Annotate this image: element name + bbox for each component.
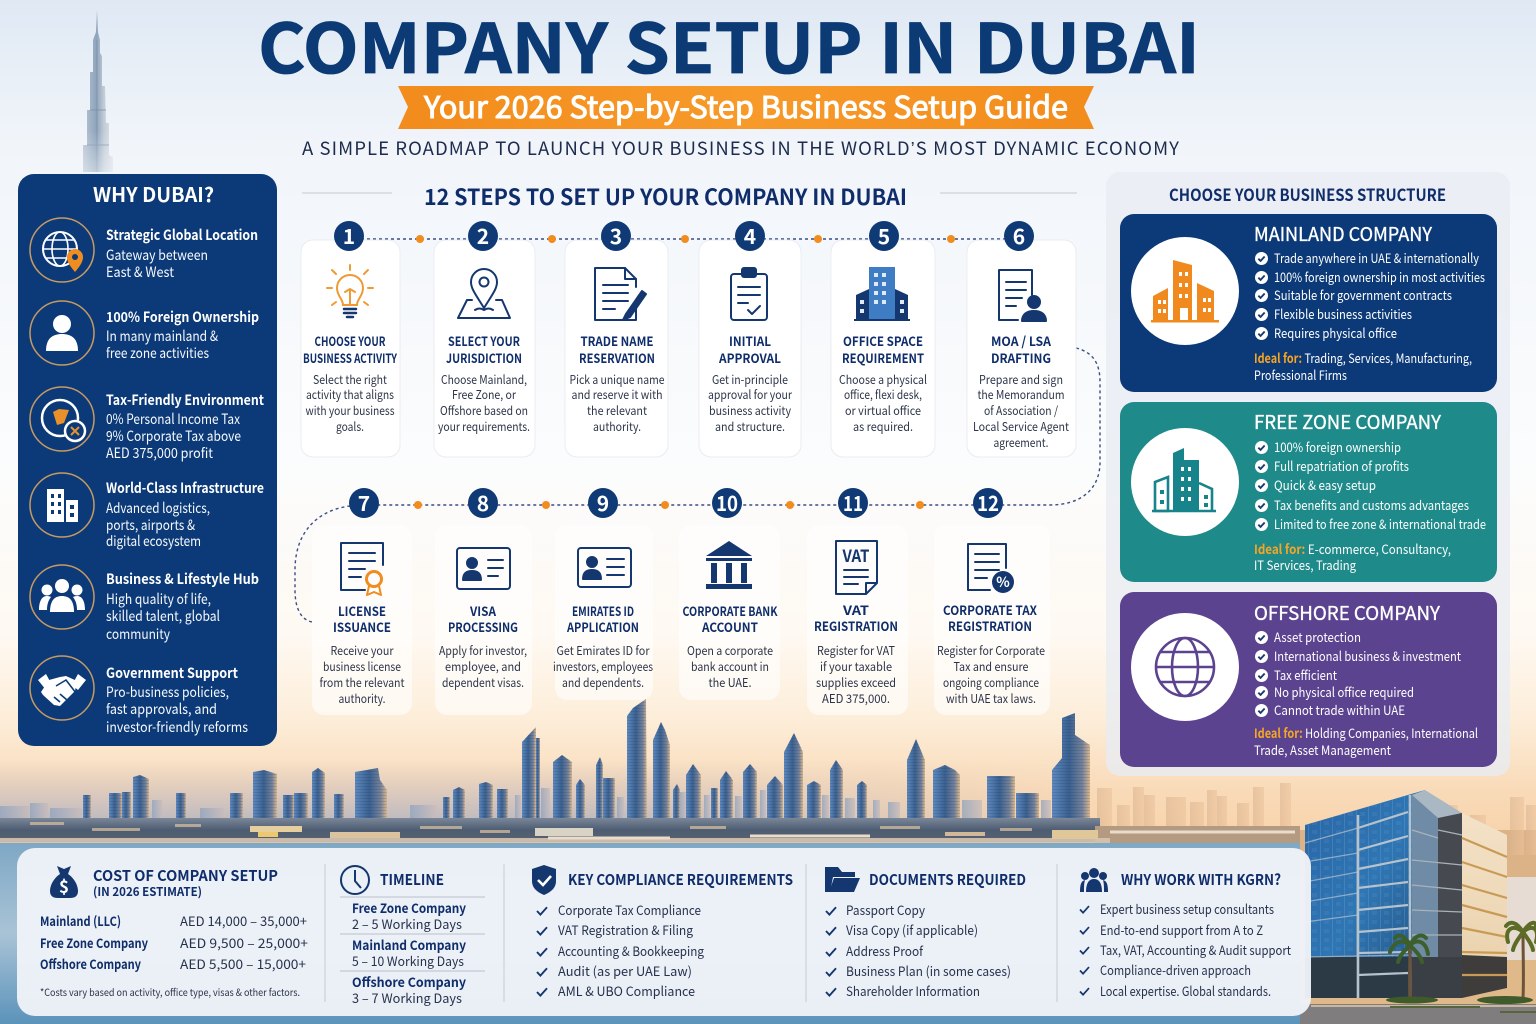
item: lifestyle hub: Business & Lifestyle Hub	[106, 569, 259, 589]
icon: shield	[532, 865, 556, 895]
step 8 card: PROCESSING	[448, 617, 518, 636]
step 4 card	[699, 221, 801, 457]
card: offshore company	[1120, 592, 1497, 767]
panel: why Dubai	[18, 174, 277, 746]
step 12 card	[934, 488, 1050, 715]
step 6 card: the Memorandum	[978, 386, 1064, 403]
section: timeline: 2 – 5 Working Days	[352, 914, 462, 933]
step 6 card: DRAFTING	[991, 348, 1051, 367]
step 6 card: Prepare and sign	[979, 371, 1063, 388]
item: infrastructure: digital ecosystem	[106, 531, 201, 551]
step 6 card: MOA / LSA	[991, 331, 1052, 350]
icon: money bag	[50, 866, 78, 898]
card: mainland company: Trade anywhere in UAE & internationally	[1274, 248, 1479, 267]
step 3 card: TRADE NAME	[580, 331, 654, 350]
card: free zone company: Tax benefits and customs advantages	[1274, 495, 1469, 514]
card: free zone company: Quick & easy setup	[1274, 475, 1376, 494]
section: key compliance requirements: KEY COMPLIANCE REQUIREMENTS	[568, 869, 793, 890]
step 7 card: business license	[323, 658, 401, 675]
section: why work with KGRN: Tax, VAT, Accounting & Audit support	[1100, 940, 1291, 959]
card: free zone company	[1120, 402, 1497, 582]
step 10 card: ACCOUNT	[701, 617, 758, 636]
step 3 card: Pick a unique name	[570, 371, 665, 388]
card: offshore company: Trade, Asset Management	[1254, 740, 1391, 759]
icon: visa card	[457, 548, 510, 589]
step 2 card: 2	[477, 221, 489, 251]
section: cost of company setup	[40, 865, 308, 999]
step 1 card: Select the right	[313, 371, 387, 388]
icon: document and signer	[999, 270, 1046, 321]
section: documents required: DOCUMENTS REQUIRED	[869, 869, 1026, 890]
card: free zone company: IT Services, Trading	[1254, 555, 1357, 574]
heading: 12 steps: 12 STEPS TO SET UP YOUR COMPANY IN DUBAI	[424, 180, 907, 212]
icon: clock	[341, 866, 369, 894]
section: why work with KGRN: WHY WORK WITH KGRN?	[1121, 869, 1281, 890]
section: cost of company setup: Mainland (LLC)	[40, 911, 121, 930]
section: why work with KGRN: Local expertise. Global standards.	[1100, 981, 1271, 1000]
section: why work with KGRN: Expert business setup consultants	[1100, 899, 1274, 918]
item: tax friendly: 0% Personal Income Tax	[106, 409, 240, 429]
step 10 card	[679, 488, 780, 700]
icon: VAT document	[836, 541, 877, 594]
card: free zone company: Limited to free zone & international trade	[1274, 514, 1486, 533]
step 2 card: your requirements.	[438, 418, 530, 435]
section: why work with KGRN: Compliance-driven approach	[1100, 960, 1251, 979]
step 12 card: 12	[977, 488, 999, 518]
item: strategic location	[30, 218, 258, 282]
step 11 card: 11	[843, 488, 863, 518]
item: infrastructure	[30, 473, 264, 551]
section: key compliance requirements: Corporate Tax Compliance	[558, 900, 701, 919]
item: infrastructure: Advanced logistics,	[106, 498, 210, 518]
icon: orange buildings	[1151, 260, 1219, 322]
item: infrastructure: ports, airports &	[106, 515, 195, 535]
step 3 card: the relevant	[587, 402, 647, 419]
section: key compliance requirements: VAT Registration & Filing	[558, 920, 694, 939]
card: mainland company: Suitable for government contracts	[1274, 285, 1452, 304]
step 9 card	[553, 488, 653, 700]
step 4 card: Get in-principle	[712, 371, 788, 388]
item: government support: fast approvals, and	[106, 699, 217, 719]
step 2 card: JURISDICTION	[446, 348, 522, 367]
item: strategic location: Gateway between	[106, 245, 208, 265]
panel: bottom information bar	[17, 848, 1311, 1016]
item: foreign ownership	[30, 301, 259, 365]
panel: business structure	[1106, 172, 1510, 776]
section: documents required: Business Plan (in some cases)	[846, 961, 1011, 980]
card: offshore company: Ideal for: Holding Companies, International	[1254, 723, 1478, 742]
section: cost of company setup: AED 9,500 – 25,000+	[180, 933, 308, 952]
step 2 card	[434, 221, 535, 457]
step 10 card: CORPORATE BANK	[682, 601, 778, 620]
item: foreign ownership: 100% Foreign Ownership	[106, 307, 259, 327]
step 3 card	[565, 221, 668, 457]
section: timeline: Mainland Company	[352, 935, 466, 954]
step 4 card: 4	[744, 221, 756, 251]
step 4 card: and structure.	[715, 418, 785, 435]
item: strategic location: Strategic Global Location	[106, 225, 258, 245]
step 11 card	[807, 488, 908, 715]
step 9 card: Get Emirates ID for	[556, 642, 650, 659]
step 6 card: Local Service Agent	[973, 418, 1069, 435]
step 12 card: CORPORATE TAX	[943, 600, 1037, 619]
icon: office building photo	[1305, 790, 1536, 1012]
section: documents required: Visa Copy (if applicable)	[846, 920, 978, 939]
step 12 card: REGISTRATION	[948, 616, 1032, 635]
card: offshore company: No physical office required	[1274, 682, 1414, 701]
section: key compliance requirements: Audit (as per UAE Law)	[558, 961, 692, 980]
item: foreign ownership: In many mainland &	[106, 326, 218, 346]
section: documents required: Address Proof	[846, 941, 924, 960]
card: mainland company: Flexible business activities	[1274, 304, 1412, 323]
step 7 card: 7	[358, 488, 370, 518]
item: foreign ownership: free zone activities	[106, 343, 209, 363]
icon: map pin	[458, 269, 510, 318]
heading: choose your business structure: CHOOSE YOUR BUSINESS STRUCTURE	[1169, 182, 1446, 206]
icon: folder	[825, 867, 860, 892]
section: why work with KGRN: End-to-end support from A to Z	[1100, 920, 1263, 939]
section: timeline: Free Zone Company	[352, 898, 466, 917]
step 5 card: OFFICE SPACE	[843, 331, 923, 350]
step 1 card: BUSINESS ACTIVITY	[303, 348, 397, 367]
step 3 card: RESERVATION	[579, 348, 655, 367]
card: mainland company: Professional Firms	[1254, 365, 1347, 384]
card: mainland company	[1120, 214, 1497, 392]
step 9 card: APPLICATION	[566, 617, 639, 636]
step 9 card: EMIRATES ID	[572, 601, 634, 620]
step 2 card: Offshore based on	[440, 402, 528, 419]
skyline illustration	[0, 699, 1536, 855]
step 11 card: REGISTRATION	[814, 616, 898, 635]
section: timeline: 5 – 10 Working Days	[352, 951, 464, 970]
step 2 card: Choose Mainland,	[441, 371, 527, 388]
card: mainland company: MAINLAND COMPANY	[1254, 220, 1433, 247]
section: documents required	[825, 867, 1026, 1000]
step 8 card: Apply for investor,	[439, 642, 527, 659]
icon: team	[1080, 868, 1108, 892]
icon: corporate tax document	[968, 544, 1014, 593]
icon: license	[341, 543, 383, 595]
step 5 card: office, flexi desk,	[844, 386, 922, 403]
step 2 card: SELECT YOUR	[448, 331, 520, 350]
step 1 card: with your business	[306, 402, 395, 419]
banner: subtitle ribbon: Your 2026 Step-by-Step Business Setup Guide	[423, 83, 1068, 127]
card: offshore company: Cannot trade within UAE	[1274, 700, 1405, 719]
item: government support: Pro-business policies,	[106, 682, 229, 702]
card: free zone company: FREE ZONE COMPANY	[1254, 408, 1442, 435]
step 1 card	[301, 221, 400, 457]
section: why work with KGRN	[1080, 868, 1291, 1000]
step 9 card: and dependents.	[562, 674, 644, 691]
item: lifestyle hub	[30, 565, 259, 644]
section: timeline: 3 – 7 Working Days	[352, 988, 462, 1007]
step 4 card: APPROVAL	[718, 348, 781, 367]
section: cost of company setup: Free Zone Company	[40, 933, 148, 952]
step 8 card: dependent visas.	[442, 674, 524, 691]
icon: purple globe	[1156, 638, 1214, 696]
step 12 card: with UAE tax laws.	[946, 690, 1036, 707]
icon: office building	[854, 267, 910, 321]
card: mainland company: Ideal for: Trading, Services, Manufacturing,	[1254, 348, 1472, 367]
item: infrastructure: World-Class Infrastructure	[106, 478, 264, 498]
step 7 card: ISSUANCE	[333, 617, 391, 636]
step 9 card: 9	[597, 488, 609, 518]
step 11 card: Register for VAT	[817, 642, 895, 659]
step 6 card	[967, 221, 1076, 457]
icon: teal buildings	[1152, 448, 1216, 511]
step 7 card	[312, 488, 412, 715]
icon: Burj Khalifa tower	[83, 10, 113, 172]
section: cost of company setup: AED 14,000 – 35,000+	[180, 911, 307, 930]
step 8 card: 8	[477, 488, 489, 518]
card: offshore company: Tax efficient	[1274, 665, 1337, 684]
step 8 card: VISA	[469, 601, 497, 620]
item: government support: Government Support	[106, 663, 238, 683]
card: free zone company: Ideal for: E-commerce, Consultancy,	[1254, 539, 1451, 558]
icon: corporate tax document: %	[996, 572, 1010, 592]
step 7 card: Receive your	[330, 642, 394, 659]
section: timeline: Offshore Company	[352, 972, 467, 991]
step 8 card: employee, and	[445, 658, 521, 675]
step 1 card: activity that aligns	[306, 386, 394, 403]
item: tax friendly: AED 375,000 profit	[106, 443, 214, 463]
section: timeline	[340, 866, 485, 1007]
step 6 card: 6	[1013, 221, 1025, 251]
step 5 card: Choose a physical	[839, 371, 927, 388]
icon: VAT document: VAT	[842, 542, 870, 567]
step 11 card: if your taxable	[820, 658, 892, 675]
step 3 card: authority.	[593, 418, 641, 435]
card: offshore company: OFFSHORE COMPANY	[1254, 599, 1441, 626]
section: cost of company setup: Offshore Company	[40, 954, 141, 973]
step 5 card: REQUIREMENT	[842, 348, 924, 367]
icon: document and pen	[595, 268, 646, 320]
step 1 card: CHOOSE YOUR	[314, 331, 386, 350]
step 10 card: Open a corporate	[687, 642, 773, 659]
step 10 card: bank account in	[691, 658, 769, 675]
step 11 card: VAT	[842, 600, 869, 619]
section: cost of company setup: AED 5,500 – 15,000+	[180, 954, 306, 973]
section: key compliance requirements: AML & UBO Compliance	[558, 981, 695, 1000]
icon: bank	[706, 541, 752, 589]
step 6 card: of Association /	[984, 402, 1058, 419]
step 11 card: AED 375,000.	[822, 690, 890, 707]
step 6 card: agreement.	[994, 434, 1048, 451]
step 7 card: LICENSE	[338, 601, 386, 620]
step 7 card: from the relevant	[320, 674, 405, 691]
step 11 card: supplies exceed	[816, 674, 896, 691]
step 4 card: business activity	[709, 402, 792, 419]
icon: emirates ID	[578, 548, 631, 587]
item: government support	[30, 656, 248, 737]
icon: clipboard	[731, 268, 767, 320]
step 4 card: approval for your	[708, 386, 792, 403]
item: government support: investor-friendly reforms	[106, 717, 248, 737]
card: offshore company: International business & investment	[1274, 646, 1461, 665]
section: cost of company setup: COST OF COMPANY SETUP	[93, 865, 278, 886]
step 5 card	[831, 221, 935, 457]
step 1 card: goals.	[336, 418, 364, 435]
step 2 card: Free Zone, or	[452, 386, 516, 403]
card: mainland company: Requires physical office	[1274, 323, 1397, 342]
step 12 card: ongoing compliance	[943, 674, 1039, 691]
icon: light bulb	[327, 265, 373, 317]
item: strategic location: East & West	[106, 262, 175, 282]
step 9 card: investors, employees	[553, 658, 653, 675]
step 3 card: and reserve it with	[572, 386, 662, 403]
card: offshore company: Asset protection	[1274, 627, 1361, 646]
step 8 card	[435, 488, 532, 715]
step 1 card: 1	[343, 221, 355, 251]
section: key compliance requirements	[532, 865, 793, 1000]
roadmap connector: dotted path	[295, 235, 1100, 622]
icon: money bag: $	[59, 873, 69, 898]
card: mainland company: 100% foreign ownership in most activities	[1274, 267, 1485, 286]
step 12 card: Register for Corporate	[937, 642, 1045, 659]
step 7 card: authority.	[338, 690, 386, 707]
step 3 card: 3	[610, 221, 622, 251]
icon: palm trees and road	[1311, 923, 1536, 1012]
item: lifestyle hub: community	[106, 624, 171, 644]
item: tax friendly	[30, 387, 264, 463]
section: documents required: Shareholder Information	[846, 981, 980, 1000]
item: tax friendly: 9% Corporate Tax above	[106, 426, 241, 446]
step 5 card: as required.	[853, 418, 913, 435]
card: free zone company: 100% foreign ownership	[1274, 437, 1401, 456]
heading: why Dubai: WHY DUBAI?	[93, 179, 214, 208]
step 12 card: Tax and ensure	[954, 658, 1029, 675]
section: key compliance requirements: Accounting & Bookkeeping	[558, 941, 705, 960]
card: free zone company: Full repatriation of profits	[1274, 456, 1409, 475]
step 10 card: 10	[716, 488, 738, 518]
step 10 card: the UAE.	[708, 674, 752, 691]
step 4 card: INITIAL	[729, 331, 771, 350]
step 5 card: or virtual office	[845, 402, 921, 419]
tagline: A SIMPLE ROADMAP TO LAUNCH YOUR BUSINESS IN THE WORLD’S MOST DYNAMIC ECONOMY	[302, 135, 1179, 161]
section: documents required: Passport Copy	[846, 900, 925, 919]
item: lifestyle hub: skilled talent, global	[106, 606, 220, 626]
section: cost of company setup: *Costs vary based on activity, office type, visas & other factors.	[40, 984, 300, 999]
section: timeline: TIMELINE	[380, 869, 444, 890]
step 5 card: 5	[878, 221, 890, 251]
item: tax friendly: Tax-Friendly Environment	[106, 390, 264, 410]
section: cost of company setup: (IN 2026 ESTIMATE)	[93, 883, 202, 900]
item: lifestyle hub: High quality of life,	[106, 589, 211, 609]
